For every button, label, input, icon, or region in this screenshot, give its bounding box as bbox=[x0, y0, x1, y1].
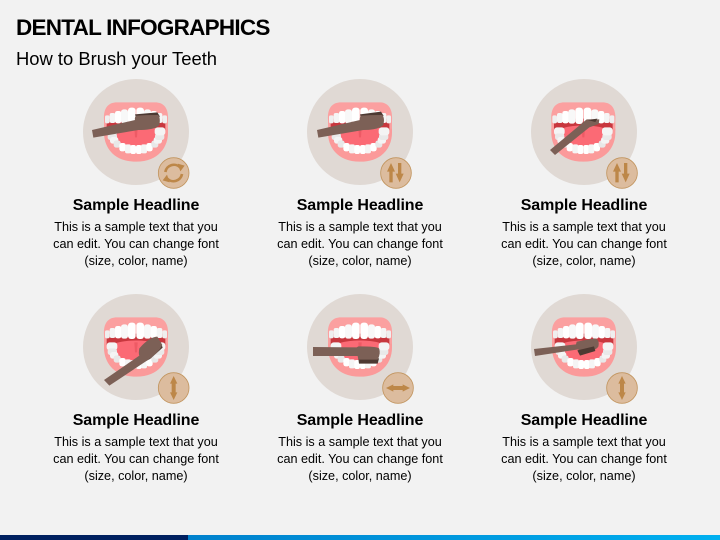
toothbrush bbox=[317, 112, 384, 138]
up-down badge bbox=[607, 158, 637, 188]
mouth bbox=[328, 317, 392, 377]
title: DENTAL INFOGRAPHICS bbox=[16, 15, 270, 40]
body text: (size, color, name) bbox=[308, 469, 412, 483]
body text: This is a sample text that you bbox=[502, 220, 666, 234]
mouth bbox=[104, 102, 168, 162]
body text: can edit. You can change font bbox=[277, 452, 443, 466]
body text: This is a sample text that you bbox=[502, 435, 666, 449]
headline: Sample Headline bbox=[73, 197, 199, 214]
body text: This is a sample text that you bbox=[278, 435, 442, 449]
background circle bbox=[307, 294, 413, 400]
mouth bbox=[104, 317, 168, 377]
panel: step 1 bbox=[53, 79, 219, 268]
background circle bbox=[83, 294, 189, 400]
body text: This is a sample text that you bbox=[278, 220, 442, 234]
body text: (size, color, name) bbox=[532, 469, 636, 483]
headline: Sample Headline bbox=[73, 412, 199, 429]
body text: This is a sample text that you bbox=[54, 220, 218, 234]
toothbrush bbox=[104, 337, 163, 386]
footer bar bbox=[0, 535, 720, 540]
body text: This is a sample text that you bbox=[54, 435, 218, 449]
body text bbox=[501, 220, 667, 268]
body text: (size, color, name) bbox=[308, 254, 412, 268]
background circle bbox=[83, 79, 189, 185]
background circle bbox=[307, 79, 413, 185]
body text bbox=[501, 435, 667, 483]
horizontal arrow badge bbox=[383, 373, 413, 403]
vertical arrow badge bbox=[158, 373, 189, 403]
rotate badge bbox=[158, 158, 189, 188]
panel: step 5 bbox=[277, 294, 443, 483]
body text: (size, color, name) bbox=[532, 254, 636, 268]
headline: Sample Headline bbox=[297, 197, 423, 214]
body text bbox=[53, 220, 219, 268]
body text: can edit. You can change font bbox=[501, 237, 667, 251]
toothbrush bbox=[534, 338, 599, 356]
mouth bbox=[328, 102, 392, 162]
panel: step 6 bbox=[501, 294, 667, 483]
toothbrush bbox=[92, 112, 160, 138]
background circle bbox=[531, 79, 637, 185]
subtitle: How to Brush your Teeth bbox=[16, 48, 217, 69]
panel: step 4 bbox=[53, 294, 219, 483]
body text: can edit. You can change font bbox=[277, 237, 443, 251]
up-down badge bbox=[381, 158, 411, 188]
headline: Sample Headline bbox=[521, 412, 647, 429]
panel: step 3 bbox=[501, 79, 667, 268]
body text: can edit. You can change font bbox=[501, 452, 667, 466]
mouth bbox=[551, 102, 615, 162]
toothbrush bbox=[313, 346, 380, 364]
mouth bbox=[552, 317, 616, 377]
panel: step 2 bbox=[277, 79, 443, 268]
body text bbox=[53, 435, 219, 483]
toothbrush bbox=[550, 119, 599, 155]
body text: (size, color, name) bbox=[84, 469, 188, 483]
headline: Sample Headline bbox=[521, 197, 647, 214]
body text bbox=[277, 220, 443, 268]
vertical arrow badge bbox=[607, 373, 637, 403]
background circle bbox=[531, 294, 637, 400]
headline: Sample Headline bbox=[297, 412, 423, 429]
body text: (size, color, name) bbox=[84, 254, 188, 268]
body text: can edit. You can change font bbox=[53, 237, 219, 251]
body text bbox=[277, 435, 443, 483]
body text: can edit. You can change font bbox=[53, 452, 219, 466]
